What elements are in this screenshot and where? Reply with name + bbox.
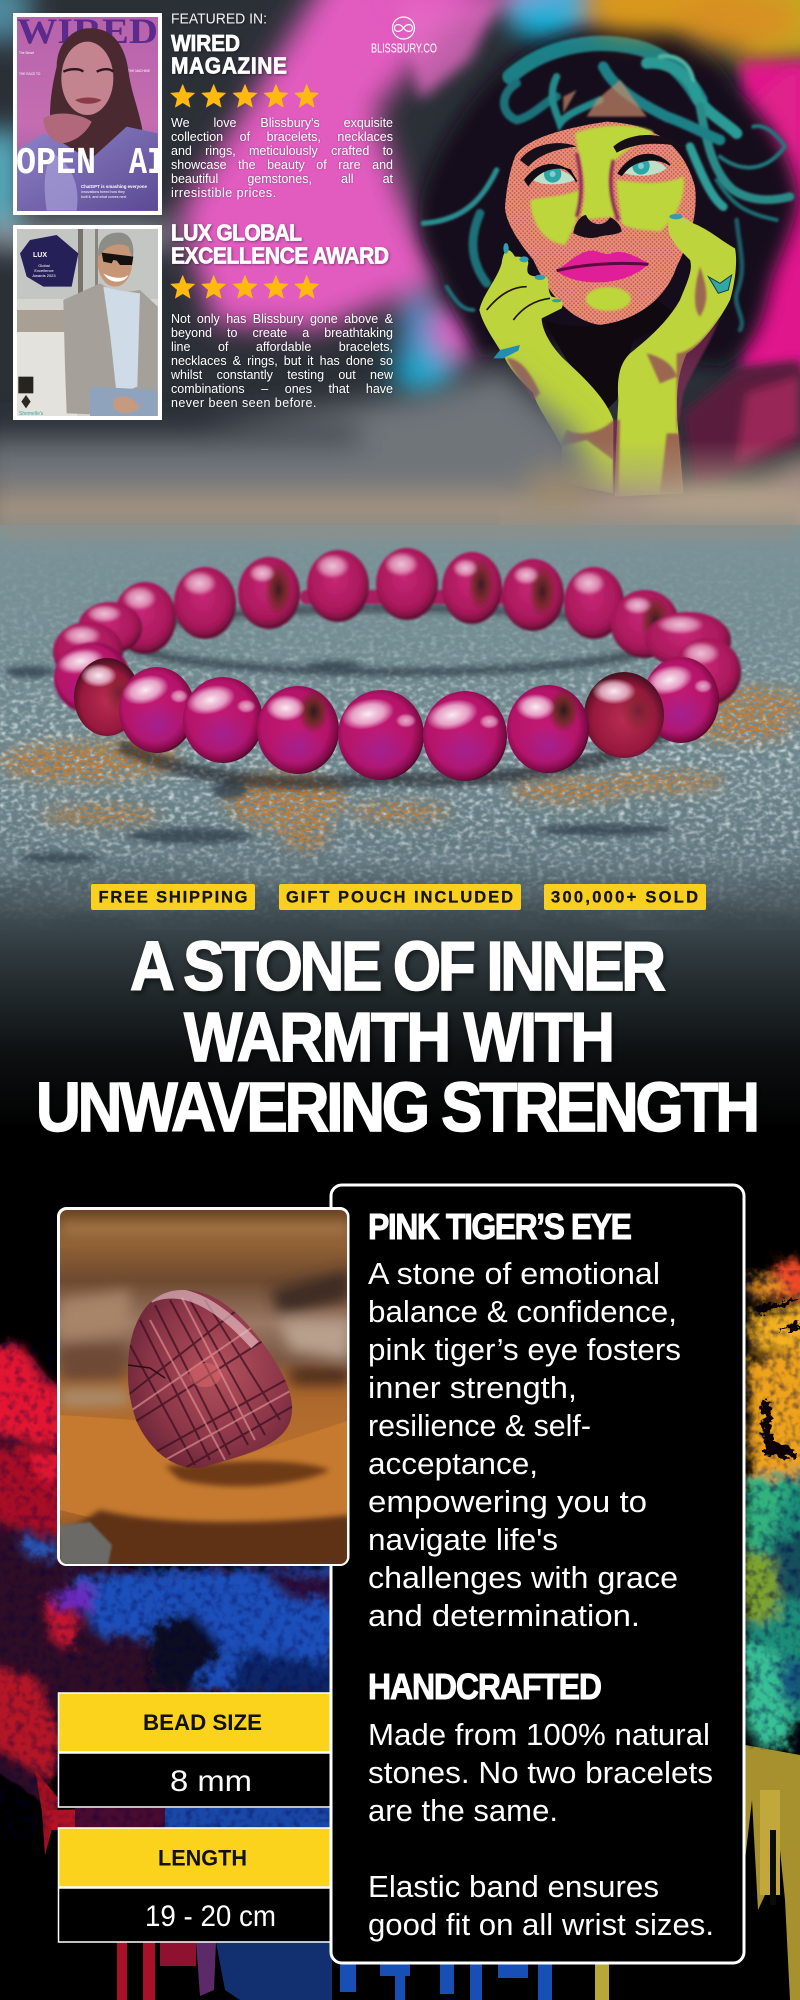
pebble	[128, 1290, 292, 1468]
text: Lux review paragraph: line of affordable bracelets,	[171, 340, 393, 354]
badges: shipping, gift pouch, sold	[91, 884, 706, 910]
text: Wired review paragraph: collection of bracelets, necklaces	[171, 130, 393, 144]
text: handcrafted description: Made from 100% natural	[368, 1718, 710, 1752]
text: stone description: balance & confidence,	[368, 1295, 677, 1329]
headline: UNWAVERING STRENGTH	[36, 1068, 760, 1146]
dark fade to black	[0, 860, 800, 1180]
bead size row	[58, 1693, 330, 1807]
text: Lux review paragraph	[171, 312, 394, 410]
magazine cover: WIRED: THE RACE TO	[19, 72, 41, 76]
text: handcrafted description: are the same.	[368, 1794, 558, 1828]
bead size row: 8 mm	[170, 1765, 252, 1798]
text: Wired review paragraph: beautiful gemstones, all at	[171, 172, 393, 186]
back beads	[53, 548, 741, 714]
award photo: LUX Global Excellence: Excellence	[34, 268, 54, 273]
specification table	[58, 1693, 330, 1942]
eyes	[533, 160, 667, 184]
heading: Pink Tiger's Eye: PINK TIGER’S EYE	[368, 1207, 632, 1247]
text: handcrafted description	[368, 1718, 714, 1942]
stars: Wired rating	[171, 84, 319, 107]
length row	[58, 1828, 330, 1942]
magazine cover: WIRED: ChatGPT is smashing everyone	[81, 184, 147, 189]
heading: Wired Magazine: MAGAZINE	[171, 52, 287, 79]
text: handcrafted description: stones. No two bracelets	[368, 1756, 713, 1790]
text: handcrafted description: good fit on all wrist sizes.	[368, 1908, 714, 1942]
stone ledge	[60, 1415, 347, 1524]
magazine cover: WIRED	[13, 11, 165, 215]
text: Lux review paragraph: Not only has Blissbury gone above &	[171, 312, 393, 326]
magazine cover: WIRED: WIRED	[17, 11, 158, 51]
text: Lux review paragraph: necklaces & rings, but it has done so	[171, 354, 393, 368]
award photo: LUX Global Excellence: Shemelle's	[19, 411, 44, 417]
text: stone description: acceptance,	[368, 1447, 538, 1481]
heading: featured in: FEATURED IN:	[171, 10, 267, 28]
text: stone description: challenges with grace	[368, 1561, 678, 1595]
heading: Handcrafted: HANDCRAFTED	[368, 1667, 602, 1707]
nose shade lines	[577, 153, 618, 220]
magazine cover: WIRED: THE MACHINE	[128, 69, 150, 73]
heading: Lux Global Excellence Award: EXCELLENCE AWARD	[171, 242, 389, 269]
paint splash: left red and blue powder	[0, 1340, 340, 1855]
stars: Lux rating	[171, 276, 319, 298]
text: handcrafted description: Elastic band ensures	[368, 1870, 659, 1904]
panel: blurred colourful hero background	[0, 0, 800, 530]
left hand	[479, 250, 613, 493]
photo: polished pink tiger's eye stone	[58, 1208, 350, 1565]
award photo: LUX Global Excellence: LUX	[33, 252, 47, 259]
award photo: LUX Global Excellence: Awards 2023	[32, 273, 56, 278]
dark cracks	[5, 661, 673, 863]
award photo: LUX Global Excellence: Global	[38, 263, 50, 268]
lips	[556, 251, 649, 282]
paint splash: right orange, green and olive drips	[745, 1262, 800, 2000]
text: stone description: inner strength,	[368, 1371, 577, 1405]
black gaps	[756, 1298, 800, 1458]
magazine cover: WIRED: The Smart	[19, 51, 34, 55]
hair strands	[423, 43, 790, 330]
fringe highlight	[563, 80, 647, 117]
magazine cover: WIRED: built it, and what comes next	[81, 195, 126, 199]
hair mass	[420, 23, 798, 367]
panel: textured stone surface	[0, 515, 800, 1094]
headline: A STONE OF INNER	[130, 927, 666, 1005]
badges: shipping, gift pouch, sold: FREE SHIPPING	[98, 888, 248, 906]
text: Wired review paragraph	[171, 116, 393, 200]
text: stone description: empowering you to	[368, 1485, 647, 1519]
badges: shipping, gift pouch, sold: GIFT POUCH INCLUDED	[286, 888, 513, 906]
right hand	[615, 216, 736, 497]
front beads	[74, 657, 719, 781]
logo: Blissbury.co: BLISSBURY.CO	[371, 42, 437, 56]
text: stone description: navigate life's	[368, 1523, 558, 1557]
heading: Wired Magazine: WIRED	[171, 30, 240, 56]
text: stone description: A stone of emotional	[368, 1257, 660, 1291]
text: Lux review paragraph: combinations – ones that have	[171, 382, 393, 396]
text: stone description: pink tiger’s eye fosters	[368, 1333, 681, 1367]
text: stone description: and determination.	[368, 1599, 640, 1633]
length row: LENGTH	[158, 1846, 247, 1870]
bracelet: pink tiger's eye beads	[53, 548, 741, 783]
badges: shipping, gift pouch, sold: 300,000+ SOLD	[551, 888, 698, 906]
bead size row: BEAD SIZE	[143, 1710, 262, 1735]
neck shadow	[543, 300, 683, 410]
lime highlights	[531, 126, 684, 311]
text: Lux review paragraph: whilst constantly testing out new	[171, 368, 393, 382]
text: stone description	[368, 1257, 681, 1633]
logo: Blissbury.co	[371, 17, 437, 56]
text: Wired review paragraph: irresistible prices.	[171, 186, 277, 200]
heading: Lux Global Excellence Award	[171, 220, 389, 269]
magazine cover: WIRED: innovations breed how they	[81, 190, 125, 194]
panel: description card	[331, 1185, 744, 1963]
length row: 19 - 20 cm	[145, 1900, 276, 1933]
magazine cover: WIRED: OPEN	[16, 142, 96, 185]
eyebrows	[520, 135, 687, 167]
text: stone description: resilience & self-	[368, 1409, 591, 1443]
sweater	[683, 360, 800, 493]
heading: Lux Global Excellence Award: LUX GLOBAL	[171, 220, 302, 246]
face	[505, 122, 696, 325]
text: Lux review paragraph: beyond to create a breathtaking	[171, 326, 393, 340]
text: Wired review paragraph: and rings, meticulously crafted to	[171, 144, 393, 158]
rust patches	[0, 687, 800, 850]
text: Lux review paragraph: never been seen before.	[171, 396, 317, 410]
headline	[36, 927, 760, 1146]
award photo: LUX Global Excellence	[13, 225, 162, 420]
nose	[573, 215, 622, 238]
nails	[503, 214, 683, 302]
bracelet shadow	[127, 608, 663, 672]
rings	[708, 275, 732, 293]
illustration: pop-art woman looking up	[420, 23, 800, 497]
magazine cover: WIRED: AI	[129, 142, 165, 185]
heading: Wired Magazine	[171, 30, 287, 79]
text: Wired review paragraph: showcase the beauty of rare and	[171, 158, 393, 172]
text: Wired review paragraph: We love Blissbury's exquisite	[171, 116, 393, 130]
hand shading	[507, 267, 720, 493]
panel: blurred foreground band	[0, 0, 800, 540]
paint drips under the table	[117, 1942, 609, 2000]
headline: WARMTH WITH	[184, 998, 615, 1076]
